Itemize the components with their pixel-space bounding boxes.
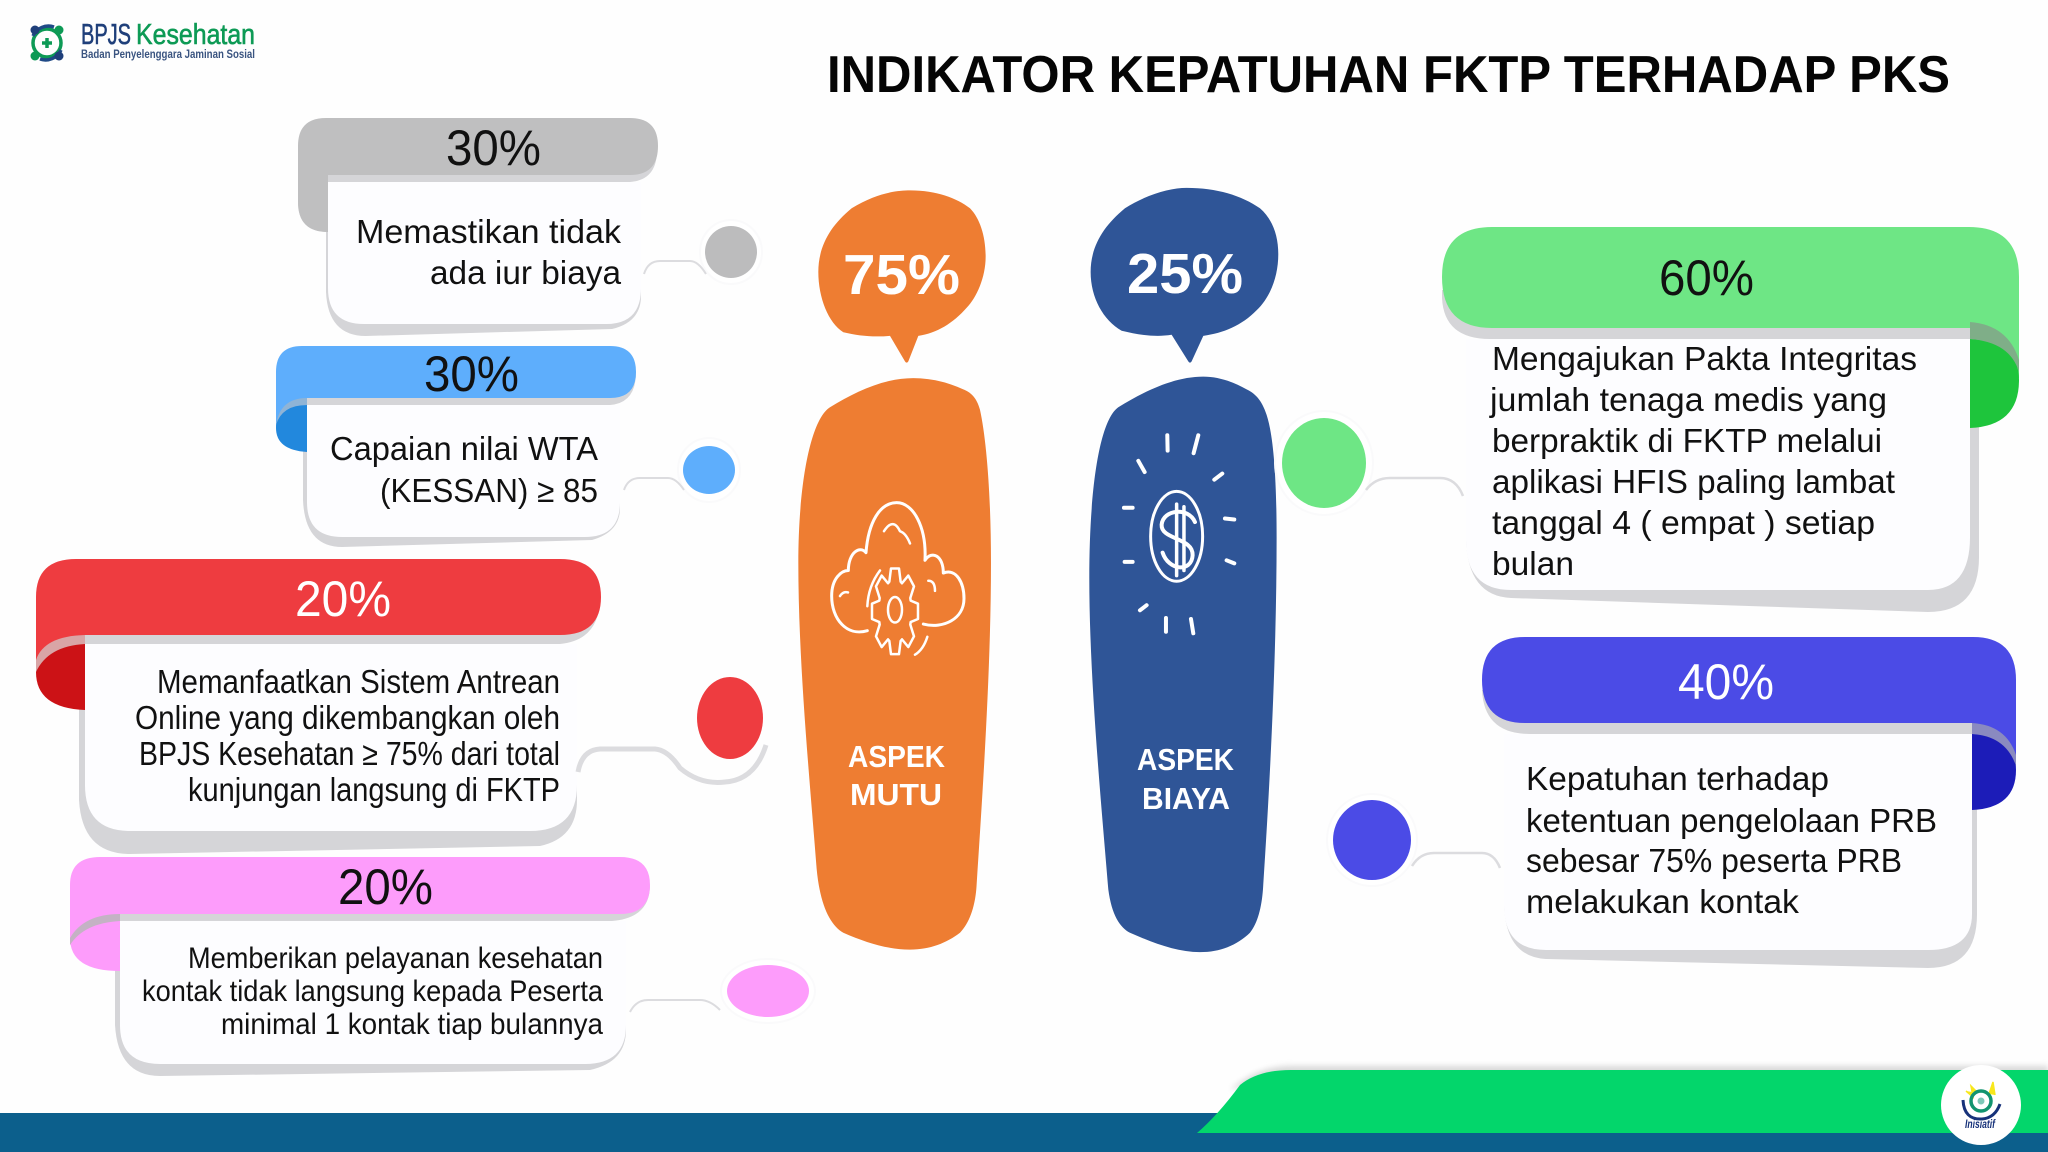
description: ketentuan pengelolaan PRB [1526, 802, 1937, 839]
logo: BPJS Kesehatan: Badan Penyelenggara Jaminan Sosial [81, 47, 255, 61]
connector and dot [1327, 794, 1500, 886]
description: Memastikan tidak [356, 213, 622, 250]
description: berpraktik di FKTP melalui [1492, 422, 1882, 459]
connector and dot [630, 959, 815, 1023]
percentage: 30% [446, 120, 541, 176]
panel: 60% pakta integritas [1275, 227, 2019, 612]
connector and dot [644, 220, 762, 284]
speech bubble: 75% [818, 190, 986, 363]
icon: cloud with gear [832, 503, 964, 655]
description: BPJS Kesehatan ≥ 75% dari total [139, 735, 560, 772]
description: Online yang dikembangkan oleh [135, 699, 560, 736]
description [330, 430, 598, 509]
logo: inisiatif badge [1941, 1065, 2021, 1145]
description: melakukan kontak [1526, 883, 1800, 920]
description: Memberikan pelayanan kesehatan [188, 942, 603, 975]
percentage: 20% [295, 571, 391, 627]
description: (KESSAN) ≥ 85 [380, 472, 598, 509]
pillar: aspek mutu [798, 378, 991, 950]
description: sebesar 75% peserta PRB [1526, 842, 1902, 879]
description: minimal 1 kontak tiap bulannya [221, 1008, 603, 1041]
icon: dollar coin with rays [1124, 435, 1234, 633]
description: tanggal 4 ( empat ) setiap [1492, 504, 1875, 541]
percentage: 60% [1659, 250, 1754, 306]
panel: 40% kepatuhan pengelolaan PRB [1327, 637, 2016, 968]
description: Capaian nilai WTA [330, 430, 598, 467]
percentage: 75% [843, 243, 960, 307]
icon: BPJS emblem [30, 26, 64, 60]
description: bulan [1492, 545, 1574, 582]
panel: 30% capaian nilai WTA [276, 346, 740, 547]
description: Kepatuhan terhadap [1526, 760, 1829, 797]
logo wordmark: BPJS [81, 19, 131, 51]
percentage: 40% [1678, 654, 1774, 710]
description [135, 663, 560, 808]
pillar: aspek biaya [1089, 377, 1277, 952]
logo: BPJS Kesehatan [30, 19, 255, 61]
label: ASPEK [1137, 742, 1235, 777]
label: ASPEK [848, 739, 946, 774]
title: INDIKATOR KEPATUHAN FKTP TERHADAP PKS [827, 46, 1950, 104]
logo: BPJS Kesehatan: Kesehatan [136, 19, 255, 51]
connector and dot [1275, 411, 1463, 515]
connector and dot [624, 438, 740, 502]
badge wordmark: Inisiatif [1965, 1117, 1996, 1131]
description [142, 942, 603, 1041]
description: kunjungan langsung di FKTP [188, 771, 560, 808]
description [356, 213, 622, 291]
percentage: 20% [338, 859, 433, 915]
description: Mengajukan Pakta Integritas [1492, 340, 1917, 377]
percentage: 25% [1127, 242, 1243, 306]
description [1526, 760, 1937, 920]
description: ada iur biaya [430, 254, 622, 291]
footer band [0, 1066, 2048, 1152]
panel: 30% memastikan tidak ada iur biaya [298, 118, 762, 336]
panel: 20% sistem antrean online [36, 559, 766, 854]
pillar: aspek biaya: BIAYA [1142, 781, 1230, 816]
pillar: aspek mutu: MUTU [850, 777, 942, 812]
panel: 20% pelayanan kontak tidak langsung [70, 857, 815, 1076]
description: jumlah tenaga medis yang [1489, 381, 1887, 418]
description: kontak tidak langsung kepada Peserta [142, 975, 603, 1008]
percentage: 30% [424, 346, 519, 402]
speech bubble: 25% [1091, 188, 1278, 363]
connector and dot [578, 677, 766, 782]
description: aplikasi HFIS paling lambat [1492, 463, 1895, 500]
description [1489, 340, 1917, 582]
description: Memanfaatkan Sistem Antrean [157, 663, 560, 700]
